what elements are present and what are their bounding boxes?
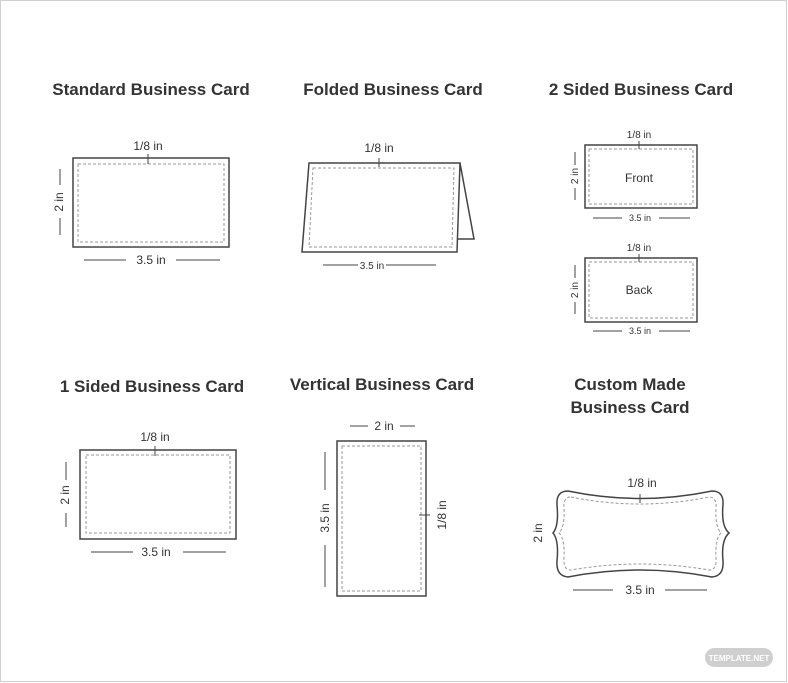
- diagram: folded card: 3.5 in: [360, 261, 384, 272]
- watermark badge: [705, 648, 773, 667]
- diagram: 2 sided front: 3.5 in: [629, 213, 651, 223]
- diagram: custom card: [531, 476, 729, 597]
- diagram: standard card: 1/8 in: [133, 139, 163, 153]
- diagram: 2 sided front: Front: [625, 171, 654, 185]
- diagram: standard card: 3.5 in: [136, 253, 166, 267]
- diagram: vertical card: 1/8 in: [435, 500, 449, 530]
- diagram: vertical card: [318, 419, 449, 596]
- diagram: folded card: [302, 141, 474, 272]
- diagram: 2 sided back: 1/8 in: [627, 243, 651, 254]
- diagram: 2 sided back: 3.5 in: [629, 326, 651, 336]
- diagram: standard card: [52, 139, 229, 267]
- diagram: 1 sided card: 2 in: [58, 485, 72, 505]
- diagram: custom card: 3.5 in: [625, 583, 655, 597]
- diagram: 1 sided card: [58, 430, 236, 559]
- title: folded: Folded Business Card: [303, 80, 483, 99]
- diagram: 2 sided back: Back: [626, 283, 653, 297]
- diagram: vertical card: 3.5 in: [318, 503, 332, 533]
- diagram: 2 sided back: 2 in: [570, 282, 581, 298]
- diagram: 1 sided card: 1/8 in: [140, 430, 170, 444]
- title: 2 sided: 2 Sided Business Card: [549, 80, 733, 99]
- diagram: 1 sided card: 3.5 in: [141, 545, 171, 559]
- diagram: custom card: 1/8 in: [627, 476, 657, 490]
- diagram: 2 sided front: 1/8 in: [627, 130, 651, 141]
- diagram: vertical card: 2 in: [374, 419, 394, 433]
- title: custom: Custom Made: [574, 375, 686, 394]
- diagram: 2 sided front: 2 in: [570, 168, 581, 184]
- diagram: custom card: 2 in: [531, 523, 545, 543]
- diagram: 2 sided back: [570, 243, 697, 336]
- diagram: folded card: 1/8 in: [364, 141, 394, 155]
- title: custom: Business Card: [570, 398, 690, 417]
- diagram: standard card: 2 in: [52, 192, 66, 212]
- title: vertical: Vertical Business Card: [290, 375, 474, 394]
- title: standard: Standard Business Card: [52, 80, 250, 99]
- title: 1 sided: 1 Sided Business Card: [60, 377, 244, 396]
- diagram: 2 sided front: [570, 130, 697, 223]
- watermark badge: TEMPLATE.NET: [709, 654, 769, 663]
